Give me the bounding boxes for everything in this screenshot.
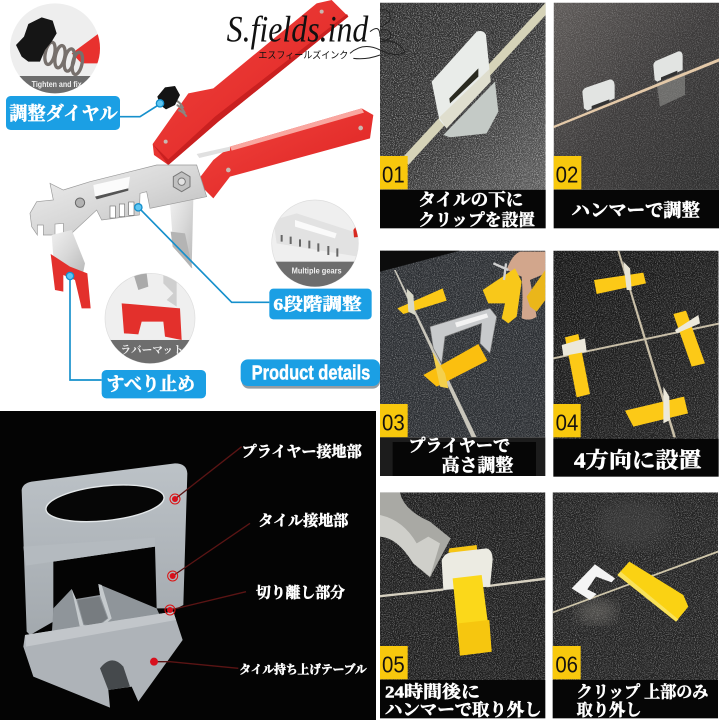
leader dot: rubber — [66, 272, 74, 280]
panels: steps 05 and 06 — [380, 492, 718, 719]
number badge 04: 04 — [556, 410, 578, 436]
caption 06 — [553, 680, 718, 719]
label: six-step adjustment — [269, 289, 372, 319]
panels: steps 03 and 04 — [380, 251, 719, 477]
number badge 05: 05 — [382, 652, 405, 678]
step 05 — [380, 492, 545, 719]
caption 01: タイルの下に — [418, 191, 523, 210]
label: lift table: タイル持ち上げテーブル — [239, 662, 367, 676]
watermark: エスフィールズインク — [258, 50, 348, 62]
clip illustration — [22, 463, 187, 708]
label: product details: Product details — [252, 361, 370, 384]
step 06 — [553, 492, 718, 719]
label: anti-slip — [102, 370, 206, 398]
metal jaw — [30, 147, 230, 268]
inset circle: multiple gears — [270, 200, 363, 288]
caption 03: 高さ調整 — [442, 455, 513, 476]
lower red handle — [197, 108, 373, 198]
step 03 — [380, 251, 545, 476]
black background — [0, 411, 376, 720]
caption 01: クリップを設置 — [418, 210, 535, 229]
label: adjusting dial — [6, 96, 120, 130]
pointer: plier contact — [170, 447, 242, 504]
caption 01 — [380, 190, 546, 229]
label: plier contact: プライヤー接地部 — [242, 443, 362, 461]
inset circle: rubber mat — [103, 273, 197, 367]
inset circle: multiple gears: Multiple gears — [292, 266, 342, 275]
caption 05 — [380, 680, 545, 719]
caption 03 — [380, 437, 545, 476]
leader dot: gears — [135, 204, 142, 211]
number badge 06 — [553, 646, 581, 679]
pointer: lift table — [150, 658, 238, 668]
watermark ornament — [380, 10, 405, 55]
inset circle: tighten and fix: Tighten and fix — [32, 80, 82, 89]
step 04 — [553, 251, 719, 477]
caption 06: クリップ 上部のみ — [577, 682, 708, 701]
caption 05: ハンマーで取り外し — [385, 700, 542, 719]
number badge 02: 02 — [556, 162, 578, 188]
upper red handle — [153, 0, 348, 165]
step 02 — [553, 3, 719, 228]
label: break-off section: 切り離し部分 — [256, 584, 345, 602]
leader dot: dial — [156, 100, 164, 107]
leader line: rubber — [70, 276, 102, 380]
pointer: break-off — [165, 592, 246, 615]
panel: clip anatomy — [0, 411, 376, 720]
inset circle: rubber mat: ラバーマット — [120, 344, 184, 356]
caption 02: ハンマーで調整 — [572, 200, 700, 221]
caption 05: 24時間後に — [385, 682, 480, 701]
leader line: gears — [138, 207, 269, 302]
adjusting knob — [157, 86, 187, 117]
red rubber foot — [51, 230, 91, 308]
caption 03: プライヤーで — [408, 437, 510, 456]
label: anti-slip: すべり止め — [107, 375, 195, 396]
number badge 06: 06 — [555, 652, 578, 678]
number badge 04 — [553, 404, 581, 437]
pointer: tile contact — [168, 523, 250, 581]
label: six-step adjustment: 6段階調整 — [273, 294, 362, 314]
number badge 03: 03 — [382, 410, 405, 436]
panel: tool product details — [6, 0, 380, 398]
watermark: S.fields.ind — [227, 10, 369, 51]
leader line: dial — [120, 104, 160, 117]
label: adjusting dial: 調整ダイヤル — [9, 103, 118, 125]
step 01 — [380, 3, 546, 229]
inset circle: tighten and fix — [10, 4, 100, 94]
label: product details — [241, 359, 380, 389]
number badge 01: 01 — [382, 162, 405, 188]
caption 04: 4方向に設置 — [574, 448, 702, 472]
caption 06: 取り外し — [577, 700, 642, 719]
caption 02 — [554, 190, 719, 228]
label: tile contact: タイル接地部 — [258, 512, 348, 530]
panels: steps 01 and 02 — [380, 3, 719, 229]
caption 04 — [553, 439, 719, 477]
